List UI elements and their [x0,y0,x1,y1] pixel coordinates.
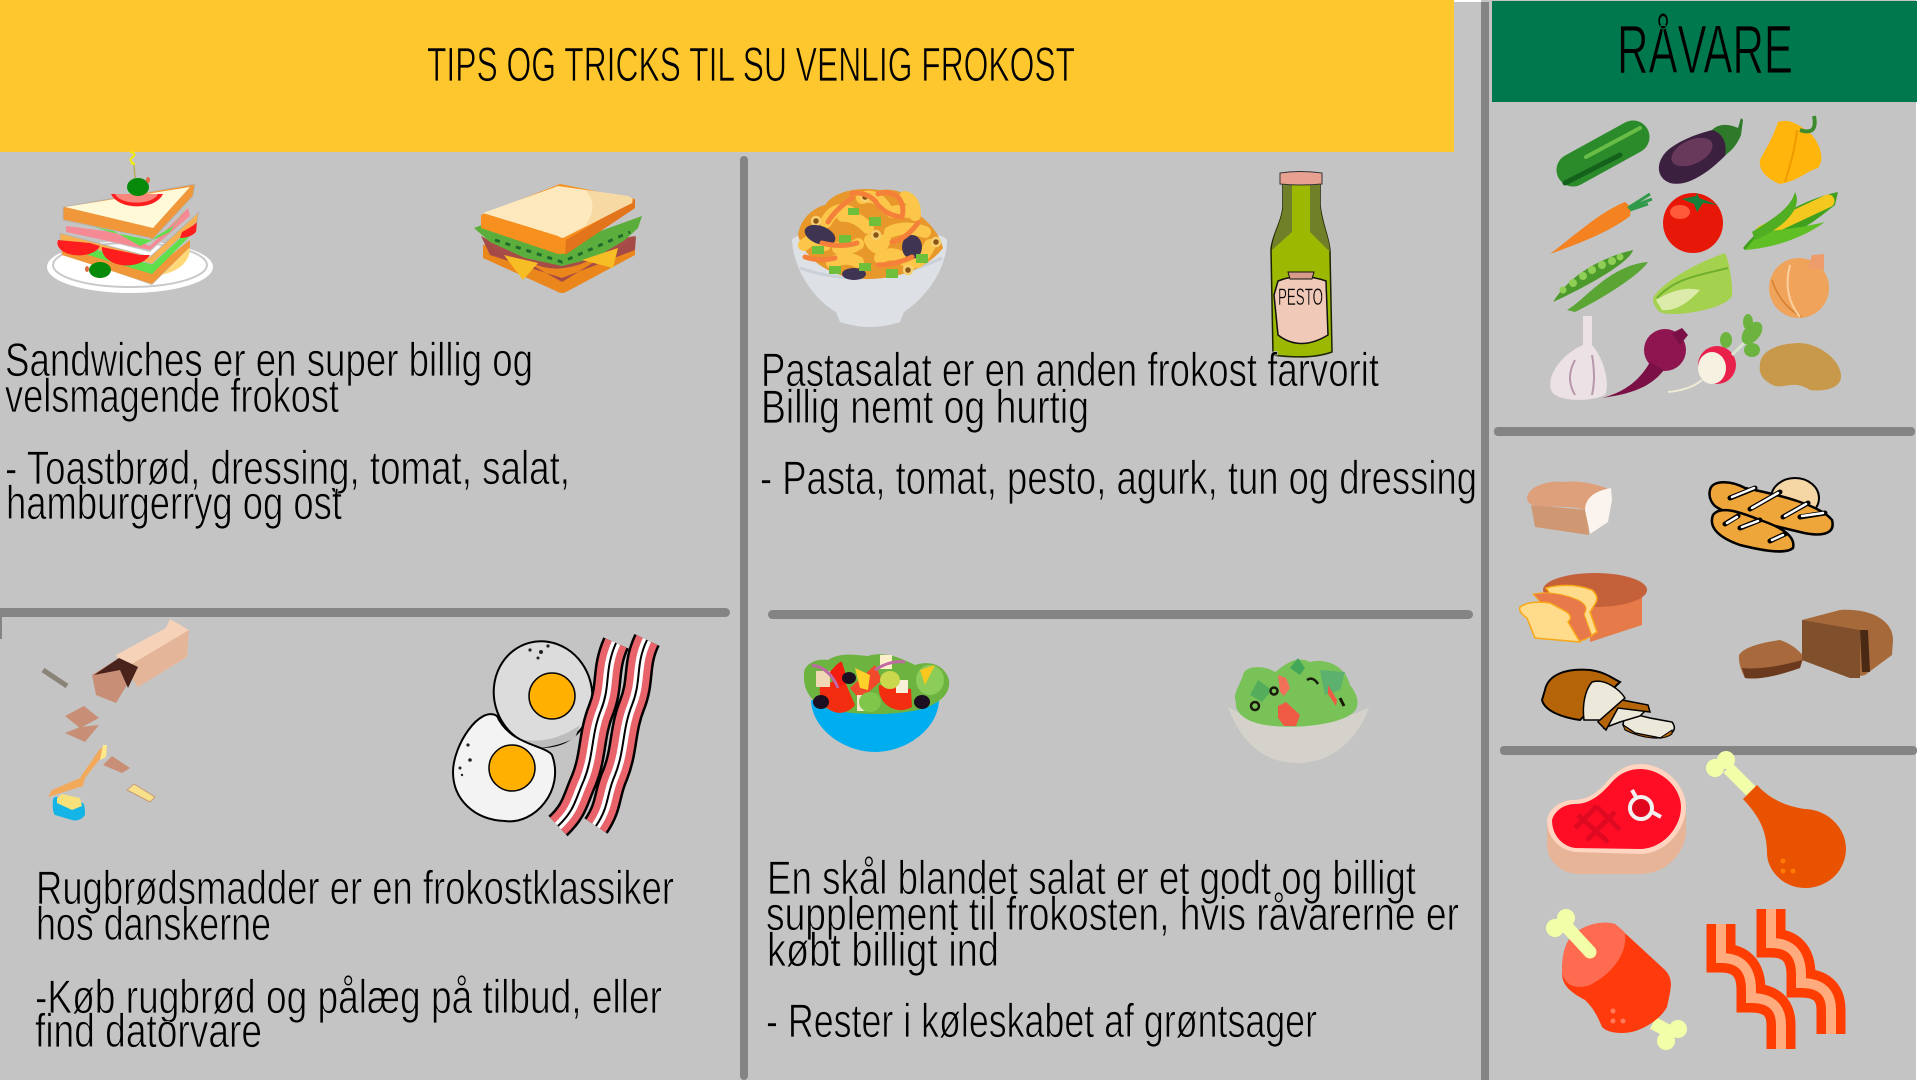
title banner [0,0,1454,152]
text: sandwich description: hamburgerryg og ost [6,477,342,530]
heading banner [1492,1,1917,102]
icon: onion [1769,254,1829,318]
text: sandwich description: Sandwiches er en super billig og [5,334,533,387]
label: pesto: PESTO [1278,284,1323,311]
vegetables group [1550,116,1841,400]
text: pastasalat description: Pastasalat er en anden frokost farvorit [761,344,1379,397]
icon: radish [1668,314,1766,392]
meat group [1546,751,1846,1050]
icon: bacon strips [1721,909,1831,1049]
text: pastasalat description [760,344,1477,505]
text: sandwich description: - Toastbrød, dressing, tomat, salat, [5,442,570,495]
bread group [1520,478,1893,738]
icon: beetroot [1602,328,1688,398]
text: pastasalat description: Billig nemt og hurtig [761,381,1089,434]
icon: cucumber [1565,128,1640,183]
icon: ham leg [1546,909,1687,1050]
text: rugbrød description [35,862,674,1058]
text: rugbrød description: Rugbrødsmadder er en frokostklassiker [36,862,674,915]
text: sandwich description [5,334,570,530]
icon: pasta salad bowl [792,189,947,327]
text: salat description: En skål blandet salat er et godt og billigt [767,852,1416,905]
text: salat description: - Rester i køleskabet af grøntsager [766,995,1317,1048]
icon: eggplant [1659,118,1743,184]
icon: steak [1547,764,1686,874]
panel: blandet salat [766,654,1459,1048]
icon: chicken leg [1706,751,1846,888]
icon: salad in white bowl [1228,658,1369,763]
icon: baguettes [1709,478,1833,551]
text: salat description: supplement til frokosten, hvis råvarerne er [766,888,1459,941]
panel: pastasalat [760,172,1477,505]
text: pastasalat description: - Pasta, tomat, pesto, agurk, tun og dressing [760,452,1477,505]
icon: salad in blue bowl [804,654,949,752]
text: salat description [766,852,1459,1048]
icon: peas [1553,250,1648,312]
icon: potato [1760,343,1841,390]
icon: dark rye bread [1739,610,1893,678]
icon: tomato [1663,193,1723,253]
text: sandwich description: velsmagende frokost [5,370,339,423]
panel: rugbrødsmadder [35,619,674,1058]
icon: white bread loaf [1527,482,1612,535]
text: salat description: købt billigt ind [767,924,999,977]
panel: sandwiches [5,152,642,530]
title: TIPS OG TRICKS TIL SU VENLIG FROKOST [427,39,1075,92]
icon: carrot [1550,194,1652,254]
icon: garlic [1550,316,1607,400]
icon: club sandwich [47,152,213,293]
text: rugbrød description: -Køb rugbrød og pålæg på tilbud, eller [35,971,662,1024]
icon: yellow pepper [1760,116,1821,184]
text: rugbrød description: hos danskerne [36,898,271,951]
icon: sandwich [474,184,642,293]
text: rugbrød description: find datorvare [35,1005,262,1058]
icon: rye bread and butter [43,619,189,820]
icon: pesto bottle [1271,172,1332,357]
icon: sliced toast loaf [1520,573,1647,642]
icon: lettuce [1653,253,1732,314]
icon: eggs and bacon [453,630,647,826]
icon: corn [1743,192,1838,250]
heading: råvare: RÅVARE [1617,11,1793,88]
icon: sliced brown loaf [1542,670,1674,738]
panel: råvarer [1492,1,1917,1050]
